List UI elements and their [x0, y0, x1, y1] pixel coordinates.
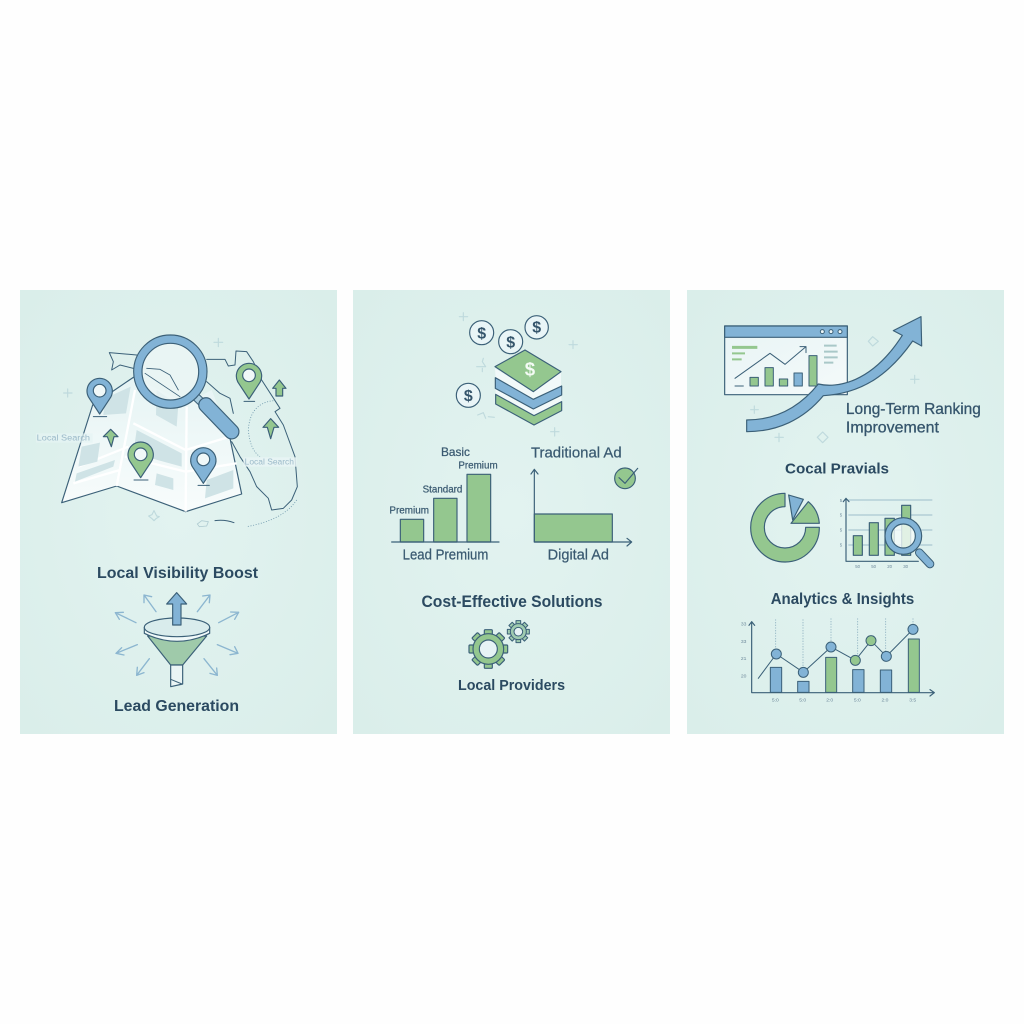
heading: analytics and insights: Analytics & Insights	[771, 591, 914, 608]
heading: long-term ranking improvement: Improvement	[846, 419, 939, 436]
icon: check badge	[615, 468, 638, 489]
icon: green pin centre	[128, 442, 153, 480]
heading: long-term ranking improvement: Long-Term Ranking	[846, 401, 981, 418]
chart: combined bar and line: 2:0	[826, 698, 833, 704]
chart: bars under magnifier: 5	[840, 513, 843, 518]
label: local search left: Local Search	[37, 433, 90, 443]
heading: long-term ranking improvement	[846, 401, 981, 436]
heading: cocal pravials: Cocal Pravials	[785, 460, 889, 477]
icon: money stack with coins	[456, 313, 577, 436]
chart: combined bar and line: 5:0	[772, 698, 779, 704]
chart: traditional versus digital ad	[531, 445, 638, 563]
chart: traditional versus digital ad: Digital Ad	[548, 547, 609, 563]
panel: local visibility and leads	[20, 290, 337, 734]
chart: combined bar and line: 5:0	[799, 698, 806, 704]
chart: bars under magnifier	[840, 498, 932, 569]
chart: combined bar and line: 2:0	[882, 698, 889, 704]
icon: money stack with coins: $	[506, 334, 515, 351]
chart: traditional versus digital ad: Traditional Ad	[531, 445, 622, 461]
heading: lead generation: Lead Generation	[114, 698, 239, 715]
chart: bars under magnifier: 20	[887, 564, 893, 569]
chart: bars under magnifier: 30	[903, 564, 909, 569]
illustration: browser window with chart	[725, 326, 847, 395]
icon: blue pin left	[87, 378, 112, 417]
bar chart: lead pricing tiers: Premium	[458, 460, 498, 471]
label: local search right: Local Search	[245, 457, 294, 467]
sparkles	[64, 338, 223, 521]
icon: magnifier	[134, 335, 232, 432]
bar chart: lead pricing tiers: Lead Premium	[403, 547, 488, 563]
icon: green pin top right	[236, 363, 262, 401]
chart: bars under magnifier: 5	[840, 543, 843, 548]
arrow: long-term growth	[747, 317, 922, 432]
illustration: map with Florida outline, pins and magnifier	[36, 335, 297, 527]
panel: cost-effective solutions	[353, 290, 670, 734]
icon: funnel with radiating arrows	[115, 593, 239, 687]
heading: local providers: Local Providers	[458, 678, 565, 694]
chart: donut with slices	[751, 493, 819, 562]
chart: bars under magnifier: 50	[855, 564, 861, 569]
heading: local visibility boost: Local Visibility Boost	[97, 565, 259, 582]
bar chart: lead pricing tiers: Premium	[389, 505, 429, 516]
icon: magnifier	[885, 518, 930, 564]
sparkles	[751, 337, 919, 443]
bar chart: lead pricing tiers: Standard	[423, 484, 462, 495]
chart: combined bar and line: 21	[741, 656, 747, 662]
dotted route	[247, 401, 297, 527]
chart: bars under magnifier: 50	[871, 564, 877, 569]
chart: combined bar and line	[741, 618, 934, 704]
heading: cost-effective solutions: Cost-Effective Solutions	[422, 593, 602, 611]
icon: money stack with coins: $	[477, 325, 486, 342]
icon: money stack with coins: $	[525, 358, 536, 379]
chart: combined bar and line: 33	[741, 639, 747, 645]
chart: bars under magnifier: 5	[840, 498, 843, 503]
chart: combined bar and line: 20	[741, 674, 747, 680]
chart: bars under magnifier: 5	[840, 528, 843, 533]
icon: green up arrows	[103, 380, 286, 447]
icon: gears	[469, 621, 529, 668]
icon: blue pin lower right	[191, 448, 216, 485]
chart: combined bar and line: 33	[741, 622, 747, 628]
bar chart: lead pricing tiers: Basic	[441, 446, 470, 459]
bar chart: lead pricing tiers	[389, 446, 499, 563]
icon: money stack with coins: $	[464, 388, 473, 405]
chart: combined bar and line: 5:0	[854, 698, 861, 704]
panel: ranking and analytics	[687, 290, 1004, 734]
icon: money stack with coins: $	[532, 320, 541, 337]
chart: combined bar and line: 3:5	[909, 698, 916, 704]
